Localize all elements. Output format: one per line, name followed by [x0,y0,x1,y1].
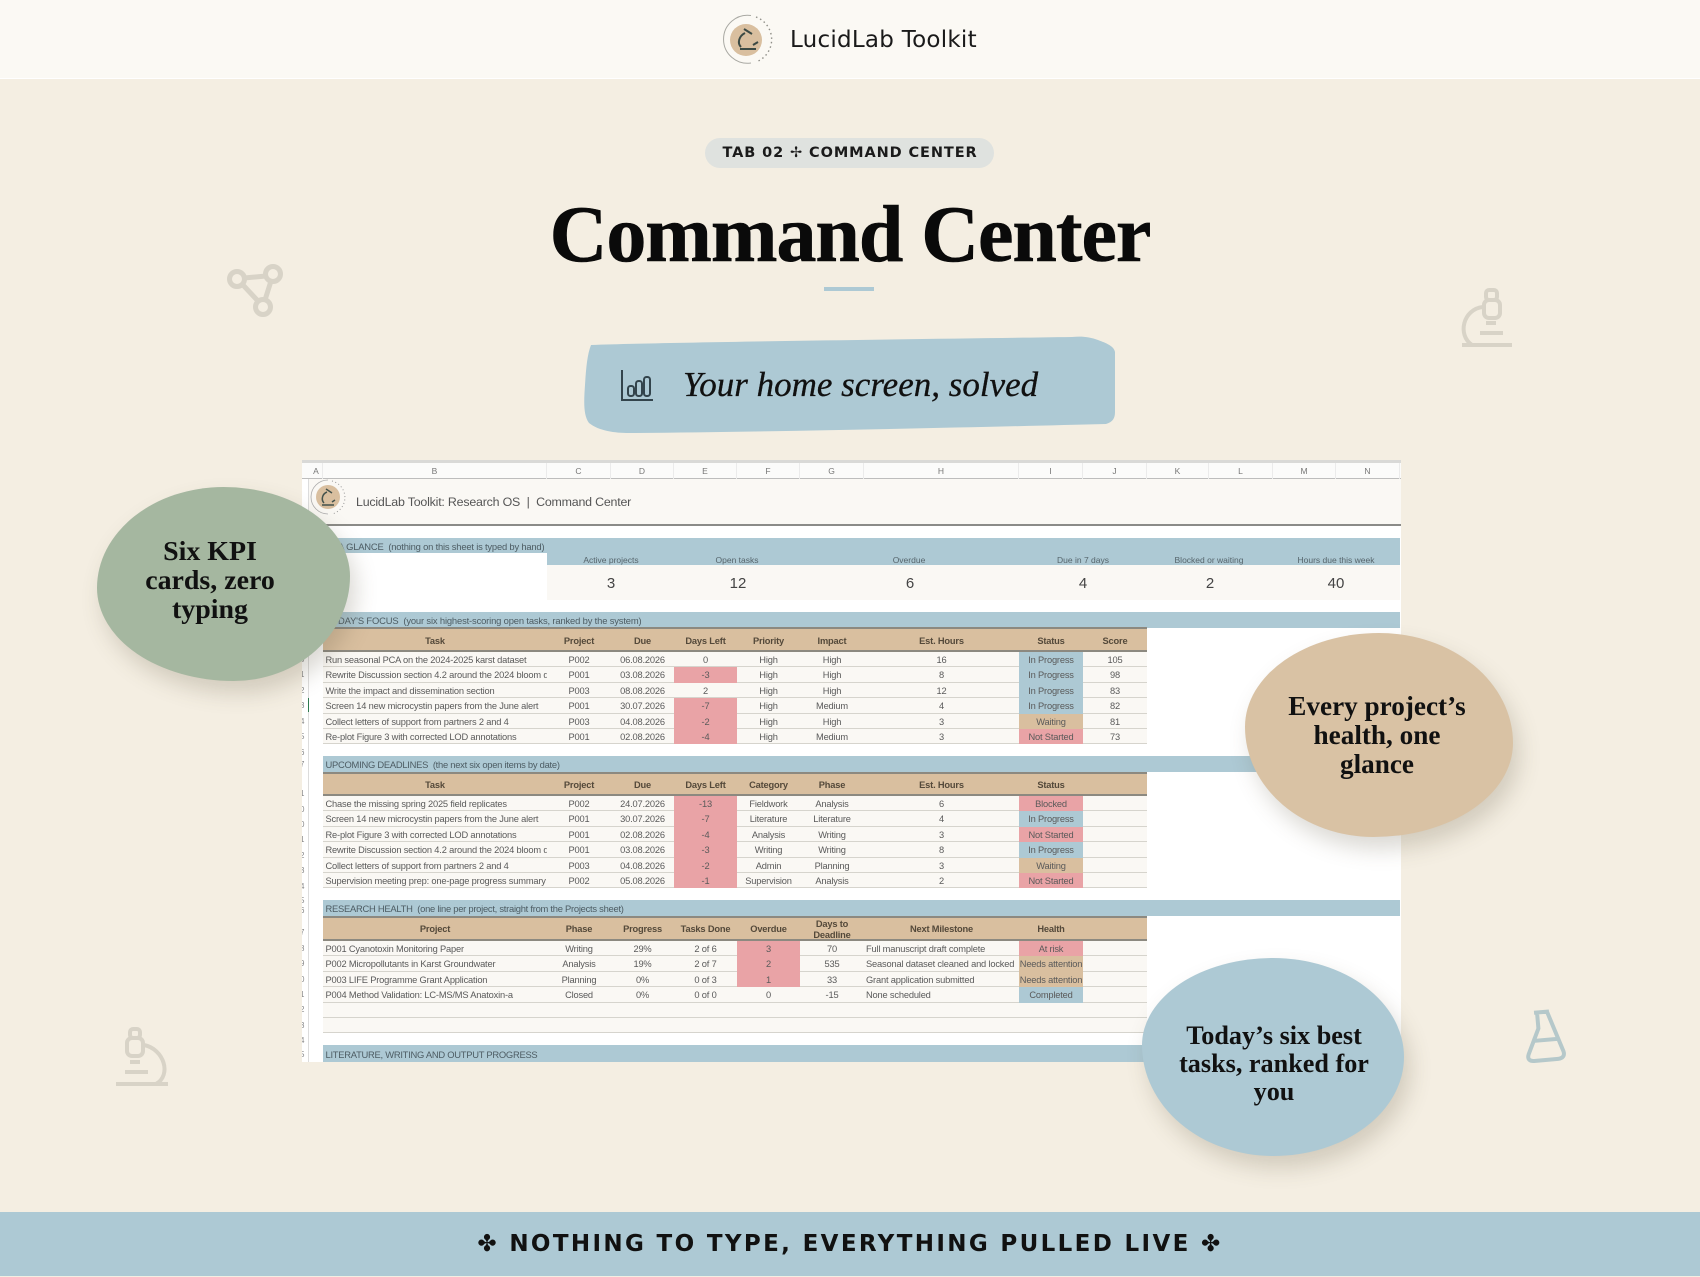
table: today's focus: 06.08.2026 [620,655,665,665]
table: research health: 1 [766,975,771,985]
icon: LucidLab logo [723,14,772,64]
table header [323,772,1147,796]
sheet background [302,460,1401,1062]
table: upcoming deadlines: Planning [815,861,849,871]
table: today's focus: P001 [568,670,590,680]
table: research health: 535 [824,959,839,969]
table header: Days Left [685,636,726,646]
table: today's focus: High [823,686,841,696]
table: upcoming deadlines: 3 [939,830,944,840]
row numbers [302,655,309,1059]
KPI: open tasks [716,554,758,592]
table: today's focus: -3 [702,670,709,680]
spreadsheet screenshot: Due in 7 days [1057,554,1109,564]
table: today's focus: 8 [939,670,944,680]
KPI label band [547,538,1400,565]
table: upcoming deadlines: Fieldwork [749,799,788,809]
table: today's focus: High [759,732,778,742]
spreadsheet screenshot: Open tasks [716,554,758,564]
table header [323,627,1147,652]
table: today's focus: 3 [939,732,944,742]
table: research health: 0 of 3 [694,975,717,985]
table: research health: P001 Cyanotoxin Monitoring Paper [326,944,464,954]
table: upcoming deadlines: 6 [939,799,944,809]
callout text: Every project’s [1288,691,1466,721]
table: upcoming deadlines: 2 [939,876,944,886]
table: today's focus: 98 [1110,670,1120,680]
highlight banner [584,336,1115,433]
KPI: hours due this week [1297,554,1375,592]
table: upcoming deadlines: 03.08.2026 [620,845,665,855]
table: upcoming deadlines: Screen 14 new microcystin papers from the June alert [326,814,538,824]
table header [323,916,1147,941]
spreadsheet screenshot: Hours due this week [1297,554,1375,564]
section: today's focus heading [323,612,1400,628]
banner text: Your home screen, solved [683,365,1038,404]
table: upcoming deadlines: Not Started [1028,830,1074,840]
callout text: glance [1340,749,1414,779]
callout text: Six KPI [163,536,257,567]
table: research health: Writing [565,944,593,954]
pill label: tab number [705,138,994,168]
section: upcoming deadlines heading: UPCOMING DEADLINES (the next six open items by date) [326,759,560,770]
table header: Status [1037,780,1065,790]
table header: Days Left [685,780,726,790]
table: upcoming deadlines: Admin [756,861,781,871]
table header: Est. Hours [919,780,964,790]
table: upcoming deadlines: Collect letters of support from partners 2 and 4 [326,861,509,871]
spreadsheet screenshot: K [1175,466,1180,476]
table: today's focus: 30.07.2026 [620,701,665,711]
callout shape [97,487,350,681]
section: literature heading [323,1045,1400,1062]
table: today's focus: In Progress [1028,655,1074,665]
table: today's focus: High [823,655,841,665]
table header: Progress [623,924,662,934]
table: research health: Planning [562,975,596,985]
table header: Task [425,636,445,646]
table: today's focus: 16 [936,655,946,665]
table: research health: 19% [633,959,652,969]
table: today's focus: High [759,655,778,665]
table: today's focus: High [823,717,841,727]
table: today's focus: 04.08.2026 [620,717,665,727]
table: today's focus: Re-plot Figure 3 with corrected LOD annotations [326,732,517,742]
pill label: tab number: TAB 02 ✢ COMMAND CENTER [722,145,978,161]
table: upcoming deadlines: Chase the missing spring 2025 field replicates [326,799,507,809]
spreadsheet screenshot: M [1300,466,1308,476]
table: upcoming deadlines: -4 [702,830,709,840]
table header: Priority [753,636,784,646]
table header: Est. Hours [919,636,964,646]
table: upcoming deadlines: P001 [568,845,590,855]
table: research health: Completed [1029,990,1073,1000]
spreadsheet screenshot: 40 [1328,575,1344,592]
table: today's focus: 2 [703,686,708,696]
table header: Score [1103,636,1127,646]
table header: Days to [816,918,848,928]
table: research health: Seasonal dataset cleaned and locked [866,959,1014,969]
table: today's focus: Collect letters of support from partners 2 and 4 [326,717,509,727]
table: research health: 0% [636,975,649,985]
spreadsheet screenshot: J [1112,466,1117,476]
spreadsheet screenshot: D [639,466,645,476]
table: today's focus: In Progress [1028,701,1074,711]
table: upcoming deadlines: Rewrite Discussion section 4.2 around the 2024 bloom d [326,845,547,855]
table: today's focus: 4 [939,701,944,711]
table: research health: Grant application submitted [866,975,974,985]
table: upcoming deadlines: Literature [813,814,851,824]
icon: molecule [227,264,283,317]
table: today's focus: High [759,717,778,727]
table: upcoming deadlines: -1 [702,876,709,886]
callout text: cards, zero [145,565,275,596]
table: upcoming deadlines: Not Started [1028,876,1074,886]
table: today's focus: High [759,686,778,696]
table header: Category [749,780,788,790]
footer bar [0,1212,1700,1276]
spreadsheet screenshot: Active projects [583,554,639,564]
spreadsheet screenshot: C [575,466,582,476]
table: upcoming deadlines: 04.08.2026 [620,861,665,871]
table header: Project [564,636,594,646]
spreadsheet screenshot: B [432,466,437,476]
table: today's focus: Write the impact and dissemination section [326,686,494,696]
table header: Due [634,780,651,790]
table: research health: At risk [1039,944,1063,954]
table: upcoming deadlines: Analysis [815,876,849,886]
callout text: you [1254,1077,1294,1106]
KPI strip [547,538,1400,600]
sheet title row [309,479,1401,526]
table: today's focus: P002 [568,655,590,665]
callout text: health, one [1314,720,1440,750]
section: at a glance heading: AT A GLANCE (nothing on this sheet is typed by hand) [326,541,544,552]
table: today's focus: 08.08.2026 [620,686,665,696]
table: today's focus: -2 [702,717,709,727]
table: research health: None scheduled [866,990,931,1000]
spreadsheet screenshot: G [828,466,835,476]
table: upcoming deadlines: 8 [939,845,944,855]
table: upcoming deadlines: P002 [568,799,590,809]
table: today's focus: 02.08.2026 [620,732,665,742]
table: today's focus: P003 [568,686,590,696]
KPI: active projects [583,554,639,592]
table: upcoming deadlines: 02.08.2026 [620,830,665,840]
table: today's focus: 0 [703,655,708,665]
table: today's focus: Run seasonal PCA on the 2024-2025 karst dataset [326,655,526,665]
KPI: blocked or waiting [1175,554,1243,592]
table: upcoming deadlines: Literature [750,814,787,824]
table: upcoming deadlines: In Progress [1028,814,1074,824]
table: today's focus: In Progress [1028,670,1074,680]
table: upcoming deadlines: P002 [568,876,590,886]
spreadsheet screenshot: 3 [607,575,615,592]
table: upcoming deadlines: 24.07.2026 [620,799,665,809]
icon: sheet logo [310,480,346,514]
callout shape [1245,633,1513,837]
table: today's focus: 03.08.2026 [620,670,665,680]
table: research health: 70 [827,944,837,954]
table: upcoming deadlines: Writing [818,830,846,840]
table: today's focus: P003 [568,717,590,727]
callout text [145,536,275,625]
table: upcoming deadlines: -3 [702,845,709,855]
callout text: Today’s six best [1186,1021,1362,1050]
callout: today's tasks [1140,958,1418,1176]
table: research health: 0% [636,990,649,1000]
table: today's focus: 3 [939,717,944,727]
spreadsheet screenshot: A [313,466,319,476]
table: upcoming deadlines [323,772,1147,888]
spreadsheet screenshot: Blocked or waiting [1175,554,1243,564]
table header: Task [425,780,445,790]
table: today's focus: Screen 14 new microcystin papers from the June alert [326,701,538,711]
table: research health: 2 [766,959,771,969]
section: research health heading: RESEARCH HEALTH (one line per project, straight from the Projects sheet) [326,903,624,914]
brush shape [584,336,1115,433]
section: today's focus heading: TODAY'S FOCUS (your six highest-scoring open tasks, ranked by the system) [326,615,641,626]
table: today's focus: Waiting [1036,717,1066,727]
table: upcoming deadlines: Blocked [1035,799,1067,809]
table header: Impact [818,636,846,646]
table: upcoming deadlines: Analysis [752,830,785,840]
spreadsheet screenshot: N [1364,466,1371,476]
table: research health: P004 Method Validation: LC-MS/MS Anatoxin-a [326,990,513,1000]
table: today's focus: -7 [702,701,709,711]
table header: Overdue [750,924,787,934]
table: upcoming deadlines: Supervision [745,876,792,886]
callout text [1179,1021,1369,1106]
table: research health: Full manuscript draft complete [866,944,985,954]
table: upcoming deadlines: 05.08.2026 [620,876,665,886]
table: today's focus: In Progress [1028,686,1074,696]
table: research health: -15 [826,990,838,1000]
table: research health: Needs attention [1020,959,1082,969]
accent rule [824,287,874,291]
table: today's focus: 81 [1110,717,1120,727]
table: today's focus: P001 [568,732,590,742]
table: today's focus: -4 [702,732,709,742]
spreadsheet screenshot: 4 [1079,575,1087,592]
callout: KPI cards [95,487,364,702]
spreadsheet screenshot: I [1049,466,1052,476]
table: research health: 0 [766,990,771,1000]
section: upcoming deadlines heading [323,756,1400,772]
table: research health: 33 [827,975,837,985]
table: upcoming deadlines: In Progress [1028,845,1074,855]
table header: Due [634,636,651,646]
table: research health: 29% [633,944,652,954]
title: Command Center [550,191,1150,279]
header bar [0,0,1700,79]
table: today's focus: Not Started [1028,732,1074,742]
table: research health: 2 of 7 [694,959,717,969]
spreadsheet screenshot: E [702,466,708,476]
gutter line [308,479,309,1062]
spreadsheet screenshot: L [1238,466,1243,476]
table: today's focus [323,627,1147,744]
table: upcoming deadlines: P003 [568,861,590,871]
spreadsheet screenshot: F [765,466,771,476]
table: research health: Analysis [562,959,596,969]
table header: Tasks Done [681,924,730,934]
icon: microscope left [116,1027,168,1086]
table: upcoming deadlines: -2 [702,861,709,871]
spreadsheet screenshot: H [938,466,944,476]
table: research health [323,916,1147,1033]
table: upcoming deadlines: Re-plot Figure 3 with corrected LOD annotations [326,830,517,840]
table header: Status [1037,636,1065,646]
table: upcoming deadlines: 4 [939,814,944,824]
table header: Project [564,780,594,790]
table header: Health [1037,924,1065,934]
table: upcoming deadlines: Writing [818,845,846,855]
callout text: tasks, ranked for [1179,1049,1369,1078]
section: literature heading: LITERATURE, WRITING AND OUTPUT PROGRESS [326,1049,537,1060]
table: research health: Closed [565,990,593,1000]
table: today's focus: Medium [816,701,848,711]
table: today's focus: 82 [1110,701,1120,711]
table: today's focus: High [759,701,778,711]
table: research health: Needs attention [1020,975,1082,985]
spreadsheet screenshot: 12 [730,575,746,592]
table: upcoming deadlines: -13 [699,799,712,809]
table: research health: 3 [766,944,771,954]
table: today's focus: Medium [816,732,848,742]
table: research health: P003 LIFE Programme Grant Application [326,975,487,985]
table: upcoming deadlines: Analysis [815,799,849,809]
sheet title text: LucidLab Toolkit: Research OS | Command Center [356,495,631,509]
table header: Phase [566,924,592,934]
KPI: due in 7 days [1057,554,1109,592]
table: upcoming deadlines: Writing [755,845,782,855]
table: today's focus: P001 [568,701,590,711]
KPI: overdue [893,554,925,592]
table: research health: 0 of 0 [694,990,717,1000]
table: today's focus: High [823,670,841,680]
table header: Project [420,924,450,934]
icon: bar chart [621,370,653,401]
table: upcoming deadlines: 3 [939,861,944,871]
table: upcoming deadlines: P001 [568,814,590,824]
callout text: typing [172,594,248,625]
icon: flask [1526,1010,1566,1063]
table: today's focus: High [759,670,778,680]
table: research health: 2 of 6 [694,944,717,954]
table: today's focus: 105 [1108,655,1122,665]
table header: Next Milestone [910,924,973,934]
table: today's focus: Rewrite Discussion section 4.2 around the 2024 bloom d [326,670,547,680]
table: today's focus: 83 [1110,686,1120,696]
table: upcoming deadlines: 30.07.2026 [620,814,665,824]
callout shape [1142,958,1404,1156]
table: upcoming deadlines: Supervision meeting prep: one-page progress summary [326,876,546,886]
table: research health: P002 Micropollutants in Karst Groundwater [326,959,495,969]
callout text [1288,691,1466,779]
table: today's focus: 73 [1110,732,1120,742]
column header row [302,463,1401,479]
table header: Deadline [813,930,851,940]
table: upcoming deadlines: P001 [568,830,590,840]
section: research health heading [323,900,1400,916]
spreadsheet screenshot: 2 [1206,575,1214,592]
icon: microscope right [1462,288,1512,347]
spreadsheet screenshot: 6 [906,575,914,592]
logo wordmark: LucidLab Toolkit [790,27,977,53]
table: upcoming deadlines: Waiting [1036,861,1066,871]
spreadsheet screenshot: Overdue [893,554,925,564]
footer bar: ✤ NOTHING TO TYPE, EVERYTHING PULLED LIVE ✤ [477,1231,1223,1257]
table: today's focus: 12 [936,686,946,696]
table: upcoming deadlines: -7 [702,814,709,824]
callout: project health [1242,633,1527,858]
table header: Phase [819,780,845,790]
